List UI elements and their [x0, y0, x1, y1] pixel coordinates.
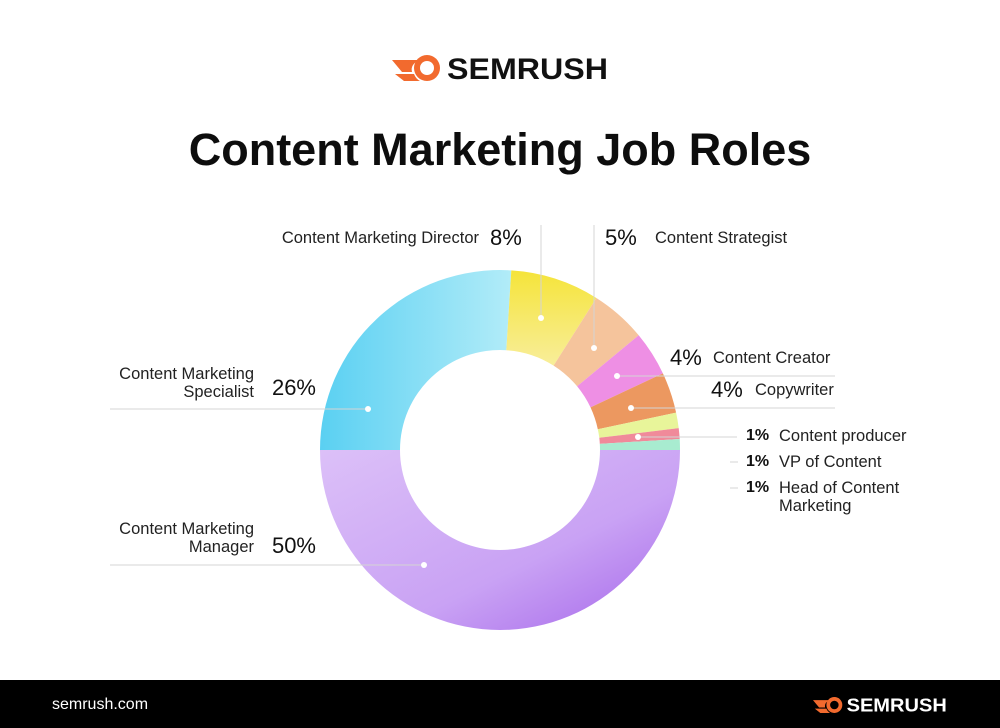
footer [0, 680, 1000, 728]
slice: producer [598, 413, 679, 438]
slice: director [506, 270, 596, 366]
label: head: Head of Content [779, 479, 899, 497]
slice: specialist [320, 270, 511, 450]
label: producer: 1% [746, 427, 769, 444]
label: creator: 4% [670, 345, 702, 370]
logo: top [392, 53, 608, 86]
label: copywriter [711, 377, 834, 402]
label: head: 1% [746, 479, 769, 496]
label: manager: Content Marketing [119, 520, 254, 538]
slice: copywriter [590, 373, 676, 429]
label: strategist [605, 225, 787, 250]
label: strategist: Content Strategist [655, 229, 787, 247]
slice: creator [577, 335, 663, 407]
label: manager: 50% [272, 533, 316, 558]
slice: vp [599, 428, 680, 444]
slice: strategist [554, 298, 639, 386]
label: producer: Content producer [779, 427, 906, 445]
label: strategist: 5% [605, 225, 637, 250]
label: copywriter: Copywriter [755, 381, 834, 399]
label: director: 8% [490, 225, 522, 250]
label: head [746, 479, 900, 515]
label: creator [670, 345, 830, 370]
footer url: semrush.com [52, 696, 148, 713]
label: director: Content Marketing Director [282, 229, 479, 247]
label: specialist [119, 365, 316, 401]
slice: head [600, 439, 680, 450]
label: specialist: Specialist [183, 383, 254, 401]
title: Content Marketing Job Roles [189, 124, 811, 175]
logo: footer [813, 695, 947, 716]
label: vp: 1% [746, 453, 769, 470]
logo: top: SEMRUSH [447, 53, 608, 86]
slice: manager [320, 450, 680, 630]
icon: semrush flame [392, 55, 440, 81]
label: specialist: Content Marketing [119, 365, 254, 383]
label: copywriter: 4% [711, 377, 743, 402]
label: creator: Content Creator [713, 349, 830, 367]
logo: footer: SEMRUSH [847, 695, 947, 716]
label: manager [119, 520, 316, 558]
label: director [282, 225, 522, 250]
label: specialist: 26% [272, 375, 316, 400]
label: manager: Manager [189, 538, 254, 556]
label: head: Marketing [779, 497, 851, 515]
label: vp: VP of Content [779, 453, 881, 471]
